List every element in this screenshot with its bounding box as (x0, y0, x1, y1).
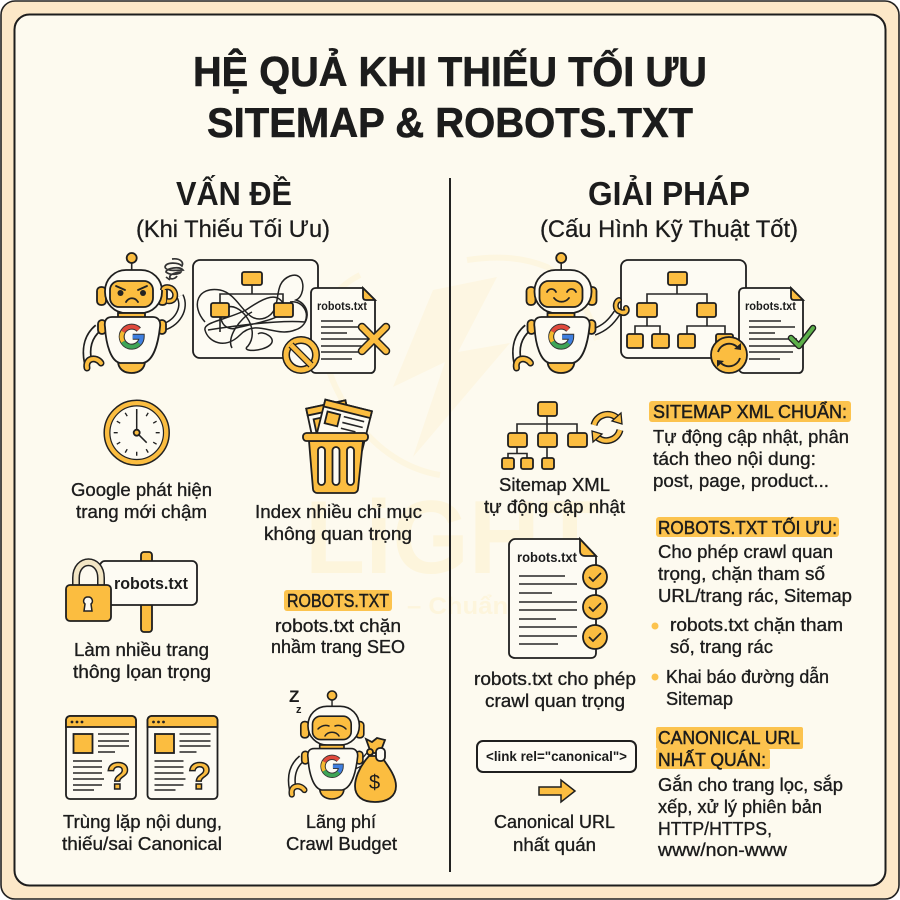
watermark: LiGHT (305, 480, 600, 596)
heading: problem: VẤN ĐỀ (176, 175, 292, 212)
icon: sleepy robot with money bag: z (296, 704, 302, 716)
title: HỆ QUẢ KHI THIẾU TỐI ƯU (193, 47, 707, 95)
callout: sitemap xml standard: post, page, product... (653, 470, 829, 491)
label: slow discovery: trang mới chậm (76, 501, 207, 522)
label: wasted crawl budget (286, 811, 397, 854)
label: duplicate content: thiếu/sai Canonical (62, 833, 222, 854)
icon: robots.txt approved: robots.txt (745, 299, 796, 313)
icon: robots.txt approved (711, 288, 813, 373)
label: slow discovery: Google phát hiện (71, 479, 212, 500)
label: confusing pages: thông lọan trọng (73, 661, 211, 682)
label: unimportant index: không quan trọng (264, 523, 412, 544)
label: robots.txt allow (474, 668, 636, 711)
label: robots.txt allow: crawl quan trọng (485, 690, 625, 711)
icon: trash with pages (303, 400, 372, 493)
label: sitemap xml: Sitemap XML (499, 474, 610, 495)
callout: robots.txt block: robots.txt chặn (275, 615, 401, 636)
callout: robots.txt optimized: ROBOTS.TXT TỐI ƯU: (658, 517, 837, 538)
icon: locked robots.txt sign: robots.txt (114, 574, 188, 593)
label: wasted crawl budget: Lãng phí (306, 811, 377, 832)
icon: canonical link tag (477, 741, 636, 772)
callout: canonical url consistent: HTTP/HTTPS, (658, 818, 772, 839)
label: duplicate content (62, 811, 222, 854)
callout: robots.txt block: nhầm trang SEO (271, 636, 405, 657)
label: wasted crawl budget: Crawl Budget (286, 833, 397, 854)
icon: duplicate pages (66, 716, 218, 799)
callout: canonical url consistent: xếp, xử lý phiên bản (658, 796, 822, 817)
heading: problem: (Khi Thiếu Tối Ưu) (136, 216, 330, 243)
callout: canonical url consistent: CANONICAL URL (658, 728, 800, 748)
heading: problem (136, 175, 330, 243)
divider (449, 178, 451, 872)
icon: angry robot (87, 253, 183, 373)
callout: robots.txt optimized (652, 517, 852, 709)
label: sitemap xml: tự động cập nhật (484, 496, 625, 517)
callout: robots.txt block: ROBOTS.TXT (287, 591, 389, 611)
callout: canonical url consistent: Gắn cho trang lọc, sắp (658, 774, 843, 795)
label: confusing pages (73, 639, 211, 682)
callout: sitemap xml standard: tách theo nội dung: (653, 448, 816, 469)
icon: canonical link tag: <link rel="canonical"> (486, 748, 627, 764)
callout: sitemap xml standard: SITEMAP XML CHUẨN: (653, 401, 847, 422)
icon: locked robots.txt sign (66, 552, 197, 632)
label: sitemap xml (484, 474, 625, 517)
icon: tangled sitemap (193, 260, 318, 358)
icon: clock (104, 400, 169, 465)
icon: sleepy robot with money bag (289, 687, 396, 802)
callout: robots.txt optimized: Sitemap (666, 688, 733, 709)
watermark: – Chuẩn – Đẹp (407, 593, 585, 620)
callout: canonical url consistent: NHẤT QUÁN: (658, 749, 766, 770)
heading: solution: (Cấu Hình Kỹ Thuật Tốt) (540, 216, 798, 243)
label: canonical url: Canonical URL (494, 811, 615, 832)
label: canonical url (494, 811, 615, 855)
title (193, 47, 707, 146)
heading: solution (540, 175, 798, 243)
callout: robots.txt block (271, 590, 405, 657)
icon: sleepy robot with money bag: Z (289, 687, 299, 706)
label: slow discovery (71, 479, 212, 522)
watermark (305, 258, 600, 620)
callout: robots.txt optimized: Khai báo đường dẫn (666, 666, 829, 687)
callout: sitemap xml standard (649, 401, 851, 491)
callout: robots.txt optimized: trọng, chặn tham số (658, 563, 825, 584)
icon: sitemap xml (502, 402, 622, 469)
arrow (539, 780, 575, 802)
callout: robots.txt optimized: Cho phép crawl quan (658, 541, 833, 562)
heading: solution: GIẢI PHÁP (588, 175, 750, 212)
callout: robots.txt optimized: URL/trang rác, Sitemap (658, 585, 852, 606)
label: canonical url: nhất quán (513, 834, 596, 855)
callout: sitemap xml standard: Tự động cập nhật, phân (653, 426, 849, 447)
label: unimportant index (255, 501, 422, 544)
icon: sleepy robot with money bag: $ (369, 772, 380, 794)
label: unimportant index: Index nhiều chỉ mục (255, 501, 422, 522)
callout: robots.txt optimized: robots.txt chặn tham (670, 614, 843, 635)
callout: canonical url consistent: www/non-www (657, 839, 788, 860)
callout: robots.txt optimized: số, trang rác (670, 636, 773, 657)
label: robots.txt allow: robots.txt cho phép (474, 668, 636, 689)
icon: robots.txt rejected: robots.txt (317, 299, 367, 313)
label: duplicate content: Trùng lặp nội dung, (63, 811, 222, 832)
icon: happy robot (516, 253, 627, 373)
title: SITEMAP & ROBOTS.TXT (207, 99, 693, 146)
icon: robots.txt checklist (509, 539, 607, 658)
icon: robots.txt checklist: robots.txt (517, 549, 577, 565)
label: confusing pages: Làm nhiều trang (74, 639, 209, 660)
icon: robots.txt rejected (286, 288, 386, 373)
icon: ordered sitemap (621, 260, 746, 358)
callout: canonical url consistent (656, 727, 843, 860)
